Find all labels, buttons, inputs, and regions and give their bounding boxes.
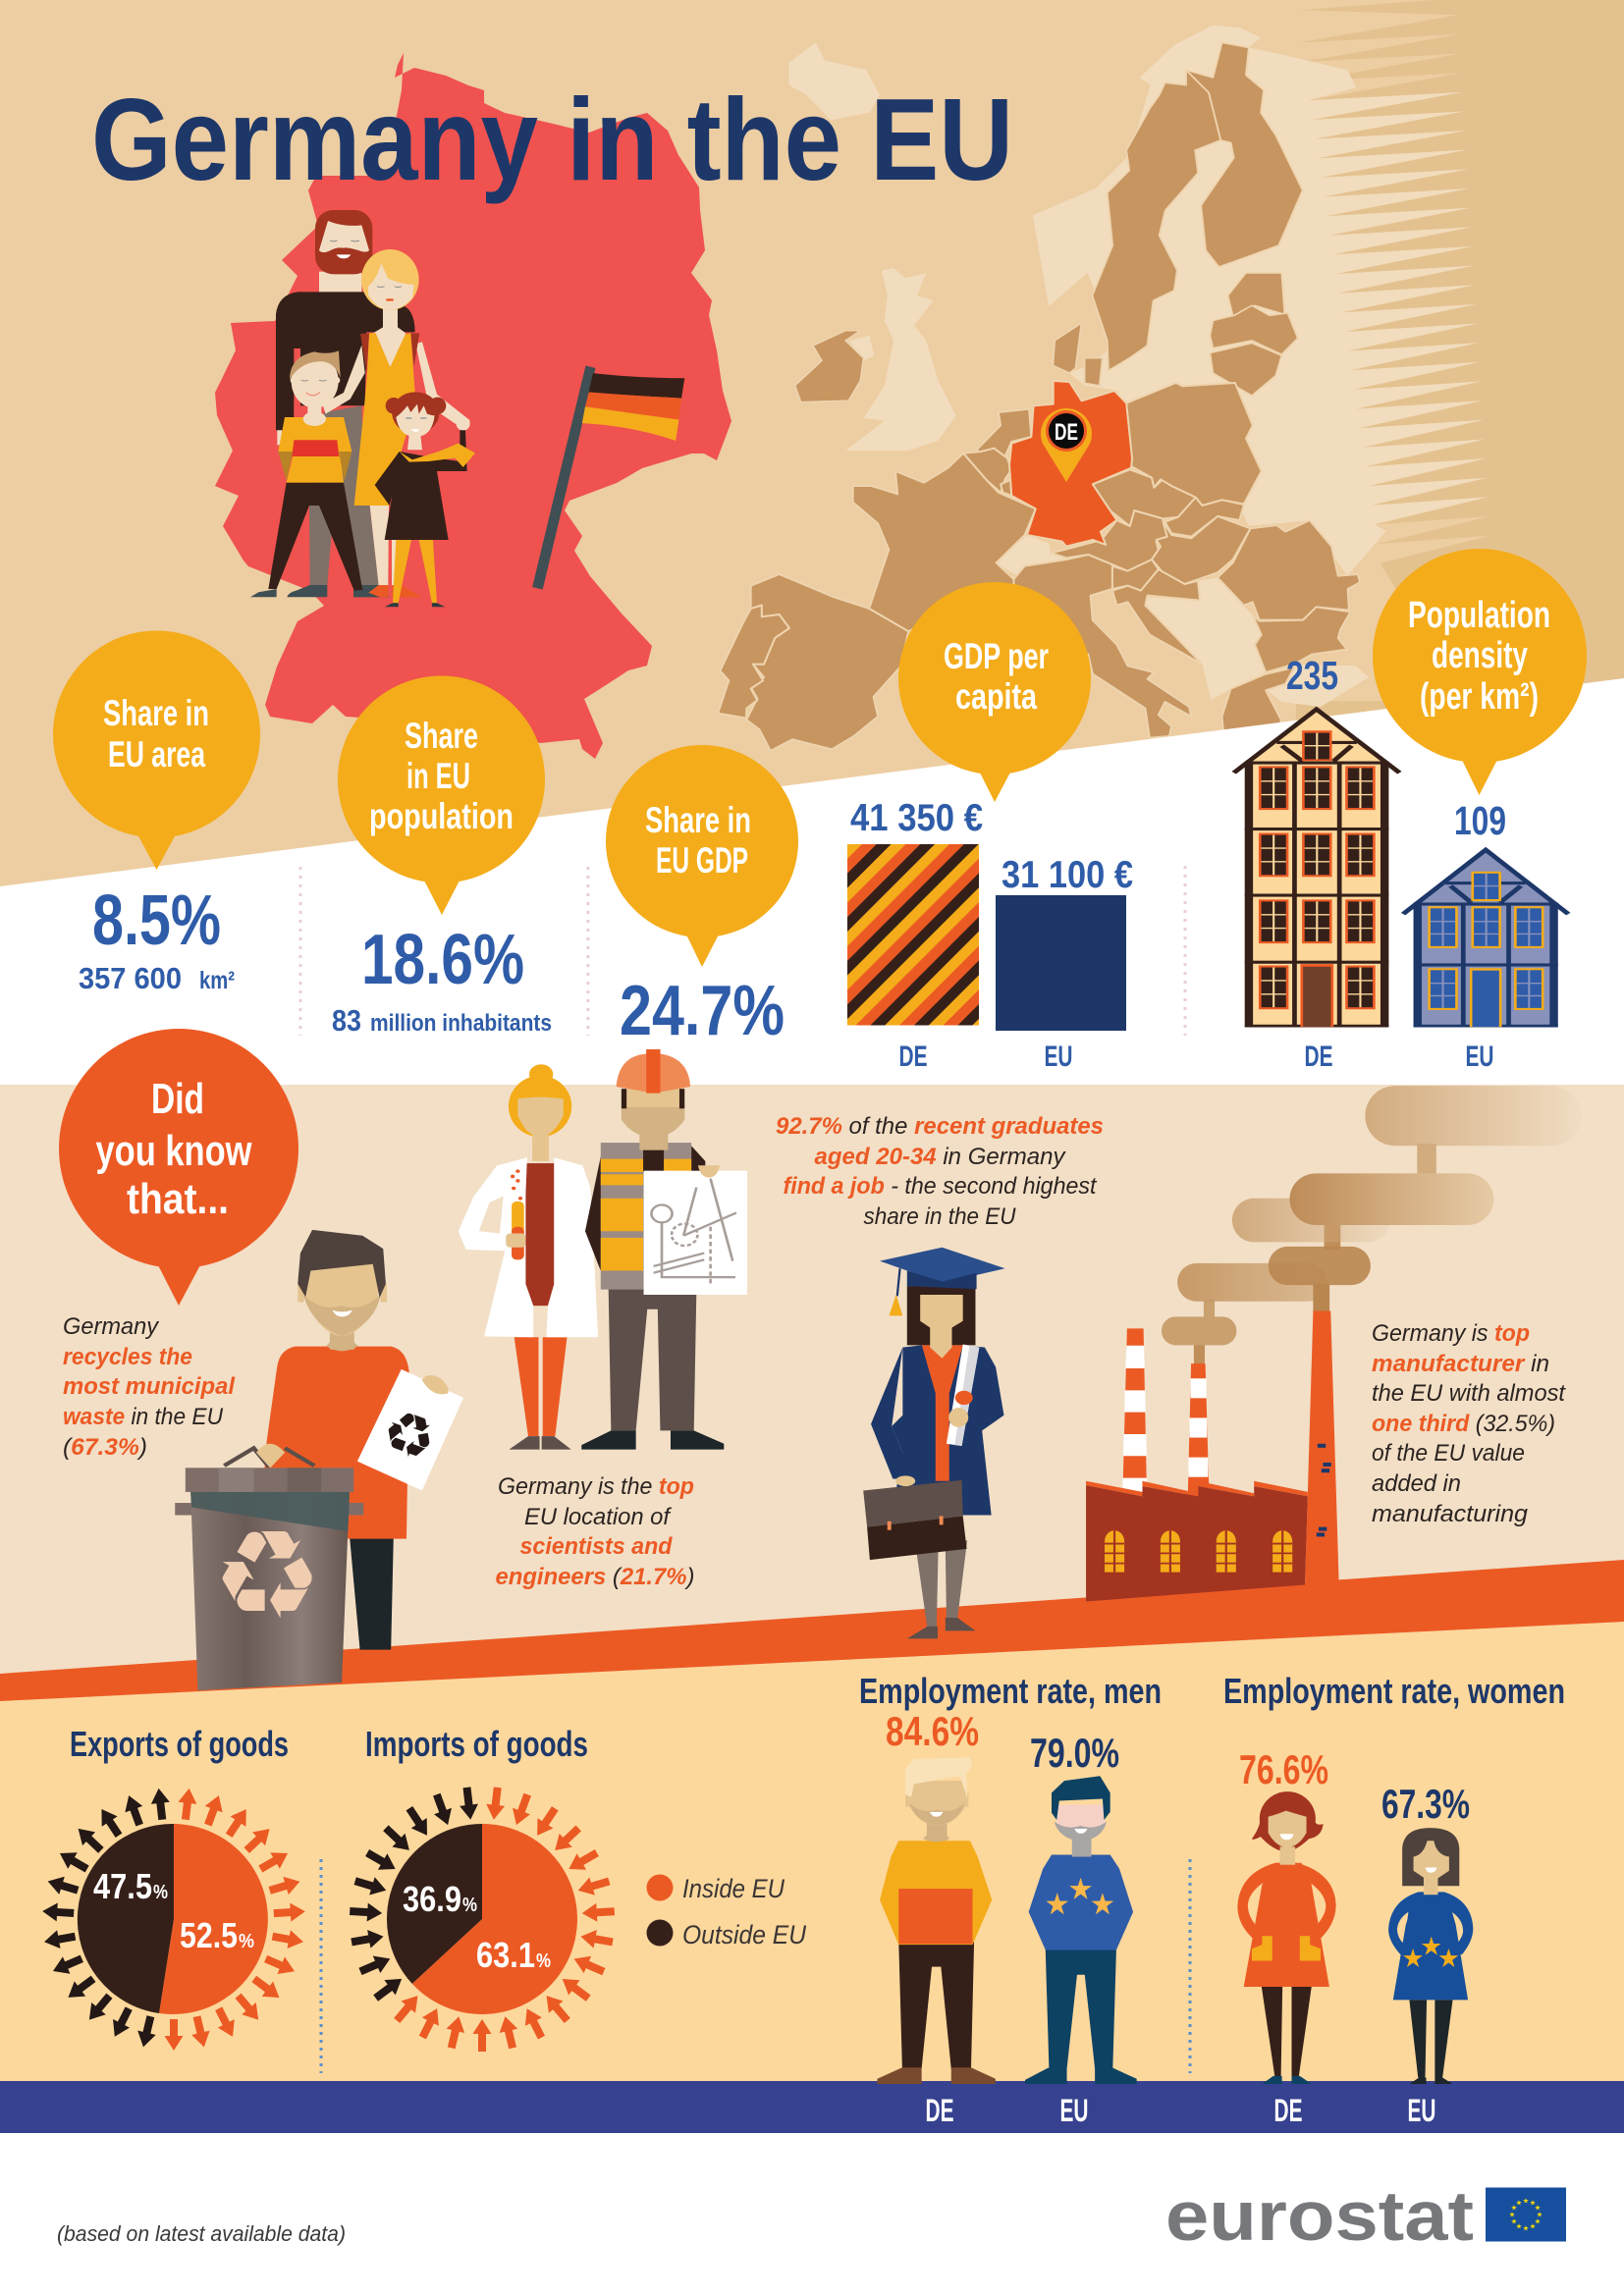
value: men DE: 84.6% bbox=[886, 1708, 979, 1754]
text: manufacturing: added in bbox=[1372, 1470, 1461, 1497]
illustration: recycling man bbox=[259, 1230, 463, 1650]
smoke bbox=[1162, 1086, 1582, 1364]
bubble: population density: (per km²) bbox=[1420, 676, 1539, 718]
arrows: exports inside EU bbox=[165, 1788, 305, 2051]
legend bbox=[646, 1874, 806, 1949]
bar chart: GDP per capita: 41 350 € bbox=[850, 797, 983, 839]
text: manufacturing: of the EU value bbox=[1372, 1440, 1525, 1467]
bubble: share in EU area: Share in bbox=[103, 693, 209, 733]
text: recycling: waste in the EU bbox=[63, 1404, 224, 1430]
text: scientists and engineers: Germany is the top bbox=[498, 1473, 694, 1500]
text: graduates: 92.7% of the recent graduates bbox=[776, 1113, 1104, 1140]
arrows: imports outside EU bbox=[350, 1787, 480, 2005]
bar chart: GDP per capita: 31 100 € bbox=[1001, 854, 1133, 896]
bubble: share in EU population: in EU bbox=[406, 756, 470, 796]
logo: eurostat bbox=[1165, 2178, 1566, 2256]
bar labels: DE EU DE EU: DE bbox=[925, 2093, 954, 2128]
text: recycling: recycles the bbox=[63, 1344, 192, 1370]
pie chart: exports: % bbox=[153, 1882, 168, 1903]
pie chart: imports: % bbox=[462, 1895, 477, 1916]
boy bbox=[250, 350, 380, 597]
map pin: DE: DE bbox=[1055, 419, 1078, 446]
figure: EU man bbox=[1025, 1776, 1137, 2084]
figure: German man bbox=[877, 1757, 996, 2084]
title: Germany in the EU bbox=[91, 75, 1013, 205]
text: manufacturing bbox=[1372, 1320, 1566, 1527]
illustration: family bbox=[250, 210, 475, 607]
bubble: GDP per capita bbox=[898, 582, 1091, 802]
white statistics band bbox=[0, 678, 1624, 1086]
text: scientists and engineers: EU location of bbox=[524, 1504, 672, 1530]
text: manufacturing: the EU with almost bbox=[1372, 1380, 1566, 1407]
orange ground band bbox=[0, 1560, 1624, 1701]
briefcase bbox=[863, 1475, 967, 1560]
dotted separators: stats bbox=[300, 866, 1185, 1036]
bar labels: DE EU DE EU: EU bbox=[1408, 2093, 1435, 2128]
bubble: share in EU population: Share bbox=[405, 716, 478, 756]
bubble: did you know: Did bbox=[151, 1075, 204, 1123]
bubble: did you know: you know bbox=[96, 1127, 252, 1175]
heading: imports of goods: Imports of goods bbox=[365, 1724, 588, 1764]
heading: exports of goods: Exports of goods bbox=[70, 1724, 289, 1764]
bar chart: GDP per capita bbox=[847, 797, 1133, 1073]
bubble: share in EU population: population bbox=[369, 796, 514, 836]
stat: EU area bbox=[79, 881, 235, 995]
pie chart: exports: 47.5 bbox=[93, 1866, 152, 1906]
map of Germany (red) bbox=[215, 53, 731, 759]
text: manufacturing: one third (32.5%) bbox=[1372, 1411, 1555, 1437]
bubble: population density: density bbox=[1432, 635, 1528, 676]
bubble: did you know: that... bbox=[127, 1175, 229, 1223]
map of Europe bbox=[718, 26, 1488, 751]
bar labels: DE EU DE EU bbox=[925, 2093, 1435, 2128]
text: recycling: (67.3%) bbox=[63, 1434, 147, 1461]
house labels: DE and EU: DE bbox=[1304, 1041, 1333, 1073]
stat: EU population: 83 bbox=[332, 1003, 361, 1038]
bar labels: DE EU DE EU: EU bbox=[1060, 2093, 1088, 2128]
stat: EU GDP: 24.7% bbox=[620, 972, 785, 1050]
bubble: share in EU area bbox=[53, 630, 260, 870]
stat: EU population bbox=[332, 921, 552, 1038]
blue ground bar bbox=[0, 2081, 1624, 2133]
figure: German woman bbox=[1237, 1791, 1336, 2084]
arrows: exports outside EU bbox=[42, 1788, 172, 2050]
logo: eurostat: eurostat bbox=[1165, 2178, 1474, 2256]
blueprint bbox=[644, 1165, 747, 1295]
illustration: recycling bin bbox=[175, 1444, 363, 1690]
test tube bbox=[506, 1169, 525, 1259]
bubble: share in EU population bbox=[338, 675, 545, 915]
bubble: population density: Population bbox=[1408, 595, 1550, 636]
dotted separators: bottom bbox=[321, 1859, 1190, 2073]
stat: EU area: 357 600 bbox=[79, 961, 182, 995]
stat: EU population: 18.6% bbox=[361, 921, 524, 999]
stat: EU area: km² bbox=[199, 967, 235, 994]
value: men EU: 79.0% bbox=[1030, 1730, 1119, 1776]
label: 235: 235 bbox=[1286, 653, 1338, 698]
bubble: population density bbox=[1373, 549, 1587, 795]
legend: Inside EU bbox=[682, 1874, 785, 1903]
house labels: DE and EU: EU bbox=[1465, 1041, 1494, 1073]
heading: employment rate, men: Employment rate, men bbox=[859, 1671, 1162, 1711]
figure: EU woman bbox=[1388, 1828, 1473, 2084]
stat: EU population: million inhabitants bbox=[370, 1010, 552, 1037]
father bbox=[276, 210, 415, 597]
text: recycling bbox=[63, 1313, 236, 1461]
text: recycling: most municipal bbox=[63, 1373, 236, 1400]
text: manufacturing: Germany is top bbox=[1372, 1320, 1530, 1347]
text: graduates: find a job - the second highest bbox=[784, 1173, 1098, 1200]
panel: trade and employment background bbox=[0, 1622, 1624, 2081]
pie chart: imports: % bbox=[536, 1950, 551, 1972]
text: scientists and engineers bbox=[495, 1473, 695, 1590]
mother bbox=[322, 249, 470, 597]
bubble: GDP per capita: capita bbox=[955, 676, 1037, 717]
illustration: scientist bbox=[459, 1064, 598, 1450]
stat: EU area: 8.5% bbox=[92, 881, 221, 960]
map pin: DE bbox=[1041, 408, 1092, 482]
text: scientists and engineers: engineers (21.7%) bbox=[495, 1564, 695, 1590]
girl bbox=[375, 392, 475, 607]
footnote: (based on latest available data) bbox=[57, 2221, 346, 2246]
text: graduates bbox=[776, 1113, 1104, 1230]
bubble: GDP per capita: GDP per bbox=[944, 636, 1049, 676]
text: graduates: share in the EU bbox=[864, 1203, 1016, 1230]
text: scientists and engineers: scientists and bbox=[520, 1533, 674, 1560]
bubble: share in EU area: EU area bbox=[108, 734, 205, 774]
panel: top map background bbox=[0, 0, 1624, 903]
legend: Outside EU bbox=[682, 1920, 806, 1949]
panel: did you know background bbox=[0, 1085, 1624, 1713]
text: manufacturing: manufacturing bbox=[1372, 1501, 1529, 1527]
illustration: EU house (109) bbox=[1403, 849, 1568, 1027]
pie chart: imports bbox=[350, 1787, 615, 2052]
value: women DE: 76.6% bbox=[1239, 1746, 1328, 1792]
pie chart: exports: % bbox=[239, 1931, 254, 1952]
bubble: share in EU GDP: Share in bbox=[645, 800, 751, 840]
pie chart: imports: 36.9 bbox=[403, 1879, 461, 1919]
illustration: engineer bbox=[581, 1049, 747, 1450]
text: graduates: aged 20-34 in Germany bbox=[815, 1144, 1066, 1170]
pie chart: exports: 52.5 bbox=[180, 1915, 238, 1955]
text: manufacturing: manufacturer in bbox=[1372, 1351, 1549, 1377]
bubble: share in EU GDP: EU GDP bbox=[656, 840, 748, 881]
Germany highlighted on map bbox=[1009, 381, 1132, 547]
illustration: graduate bbox=[863, 1248, 1005, 1638]
pie chart: exports bbox=[42, 1788, 305, 2051]
bubble: did you know bbox=[59, 1029, 298, 1306]
illustration: German flag bbox=[532, 365, 684, 590]
bubble: share in EU GDP bbox=[606, 745, 798, 967]
house labels: DE and EU bbox=[1304, 1041, 1494, 1073]
illustration: German house (235) bbox=[1234, 710, 1399, 1027]
icon: recycling symbol on bin: ♻ bbox=[212, 1505, 322, 1647]
pie chart: imports: 63.1 bbox=[476, 1935, 535, 1975]
value: women EU: 67.3% bbox=[1381, 1781, 1470, 1827]
bar chart: GDP per capita: DE bbox=[899, 1041, 927, 1073]
illustration: factory with smoke bbox=[1086, 1086, 1582, 1601]
arrows: imports inside EU bbox=[390, 1787, 615, 2052]
bar chart: GDP per capita: EU bbox=[1045, 1041, 1072, 1073]
text: recycling: Germany bbox=[63, 1313, 160, 1340]
icon: recycling symbol on paper: ♻ bbox=[372, 1395, 446, 1477]
label: 109: 109 bbox=[1454, 798, 1506, 843]
bar labels: DE EU DE EU: DE bbox=[1274, 2093, 1302, 2128]
